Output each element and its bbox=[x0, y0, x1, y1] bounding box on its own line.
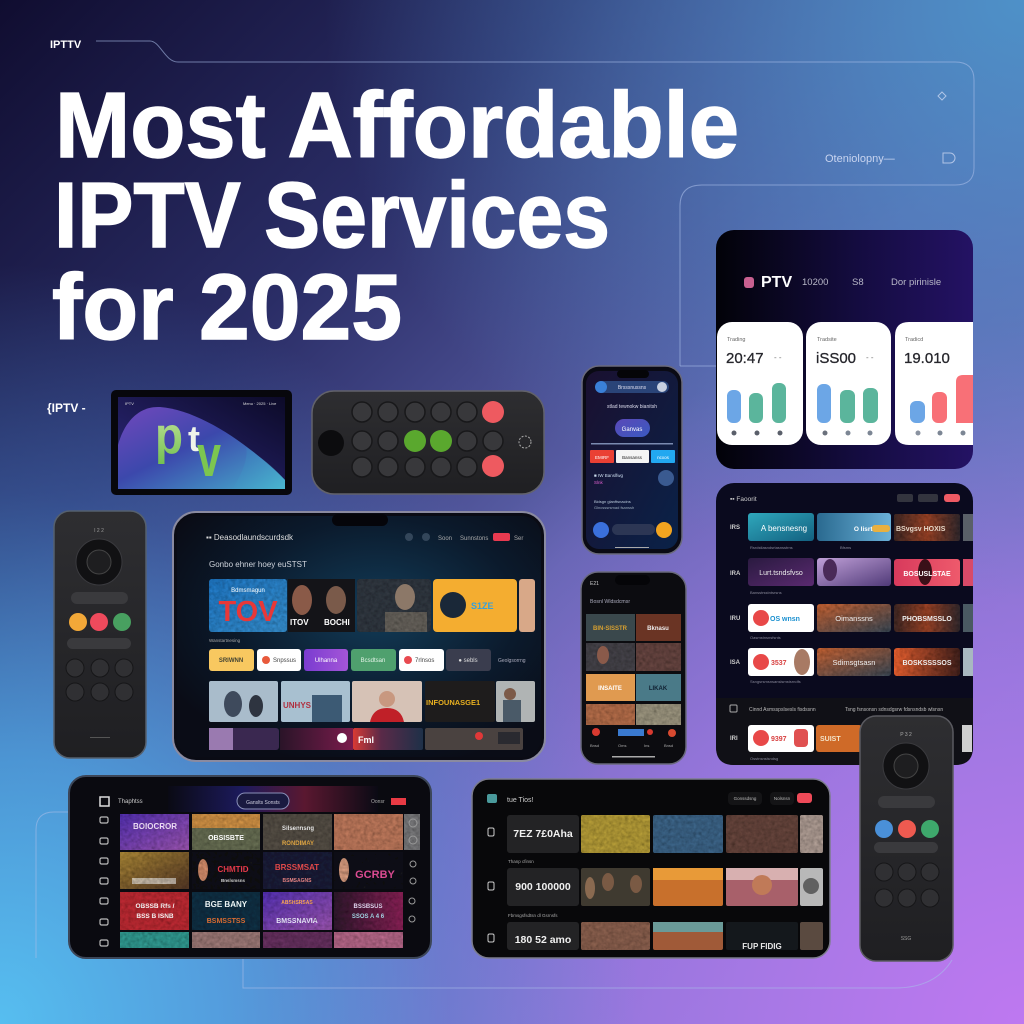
phone 2: BIN-SISSTR bbox=[593, 626, 628, 632]
poster grid: BSSBSUS bbox=[353, 904, 383, 910]
phone 2: Bnsd bbox=[590, 743, 599, 748]
row 2: Lurt.tsndsfvso bbox=[759, 570, 803, 577]
row 2: BOSUSLSTAE bbox=[903, 571, 951, 578]
large tablet streaming UI: BOCHI bbox=[324, 618, 350, 627]
ptv logo letters: p bbox=[155, 407, 183, 465]
row 3: Oimanssns bbox=[835, 614, 873, 623]
phone 1: Ganvas bbox=[622, 427, 642, 433]
side icons bbox=[100, 817, 108, 946]
phone 2: E21 bbox=[590, 581, 599, 587]
large tablet streaming UI: Bcsdtsan bbox=[361, 658, 385, 664]
vertical remote right: SSG bbox=[901, 936, 911, 942]
dashboard header: Dor pirinisle bbox=[891, 277, 941, 288]
poster row 2 bbox=[581, 868, 823, 906]
price rows bbox=[507, 815, 579, 950]
large tablet streaming UI: ITOV bbox=[290, 618, 309, 627]
poster row 3 bbox=[581, 922, 823, 951]
streaming list panel bbox=[716, 483, 973, 765]
tablet top bar: Oonsr bbox=[371, 799, 385, 805]
phone 2: Bosnl Wldsdcmsr bbox=[590, 599, 630, 605]
top-right note and icons bbox=[825, 92, 955, 165]
poster row 3: FUP FIDIG bbox=[742, 942, 782, 951]
row 3: PHOBSMSSLO bbox=[902, 616, 952, 623]
panel footer strip: SUIST bbox=[820, 736, 841, 743]
row 1: A bensnesng bbox=[761, 524, 807, 533]
row labels bbox=[488, 828, 494, 942]
row 1 bbox=[730, 513, 973, 550]
panel footer strip: 9397 bbox=[771, 736, 787, 743]
phone 2: Bknasu bbox=[647, 626, 669, 632]
poster grid: BOIOCROR bbox=[133, 822, 177, 831]
panel footer strip: Osstnsnslsndsg bbox=[750, 756, 778, 761]
row 1: IRS bbox=[730, 525, 740, 531]
phone 2: Bnsd bbox=[664, 743, 673, 748]
stat card 3: 19.010 bbox=[904, 350, 950, 367]
horizontal remote bbox=[312, 391, 544, 494]
stat card 2 bbox=[806, 322, 891, 445]
panel header: ▪▪ Faoorit bbox=[730, 496, 757, 503]
bottom-center streaming panel bbox=[472, 779, 830, 958]
stat card 1: Trading bbox=[727, 337, 745, 343]
phone 2 bbox=[581, 572, 686, 764]
price rows: 900 100000 bbox=[515, 881, 571, 893]
large tablet streaming UI: UNHYS bbox=[283, 701, 312, 710]
poster grid: ABSHSRSAS bbox=[281, 900, 313, 906]
row 2: Bansstrsstntsrsns bbox=[750, 590, 782, 595]
vertical remote right bbox=[860, 716, 953, 961]
large tablet streaming UI: Snpssus bbox=[273, 658, 296, 664]
stat card 2: - - bbox=[866, 353, 874, 362]
poster grid: CHMTID bbox=[217, 865, 249, 874]
poster grid: Bnslsmsns bbox=[221, 878, 245, 883]
row 1: Bfsms bbox=[840, 545, 851, 550]
poster grid: SSOS A 4 6 bbox=[352, 914, 385, 920]
phone 1: Brsssnussns bbox=[618, 385, 647, 391]
bottom-center streaming panel: Fbmsgsfsdtsn dl Gsrnsfs bbox=[508, 913, 558, 918]
row 3: IRU bbox=[730, 616, 740, 622]
large tablet streaming UI: 7rlnsos bbox=[415, 658, 434, 664]
bottom-center streaming panel: Thanp cfinsn bbox=[508, 859, 534, 864]
poster grid: Silsennsng bbox=[282, 826, 314, 832]
row 3: Oasmstnsnsfsnts bbox=[750, 635, 781, 640]
large tablet streaming UI: Ser bbox=[514, 536, 523, 542]
ptv logo letters: v bbox=[197, 424, 221, 489]
tablet header: ▪▪ Deasodlaundscurdsdk bbox=[206, 533, 294, 542]
vertical remote left: I 2 2 bbox=[94, 528, 104, 534]
poster grid: BSMSSTSS bbox=[207, 918, 246, 925]
right side icons bbox=[409, 819, 417, 922]
poster grid: OBSSB Rfs / bbox=[135, 903, 175, 910]
ptv logo letters bbox=[155, 407, 221, 489]
poster grid: RONDIMAY bbox=[282, 841, 314, 847]
row 4: Sdimsgtsasn bbox=[833, 658, 875, 667]
bottom-left tablet grid bbox=[69, 776, 431, 958]
row 4 bbox=[730, 648, 973, 684]
large tablet streaming UI: Sunnstons bbox=[460, 536, 488, 542]
row 4: ISA bbox=[730, 660, 741, 666]
stat card 1: 20:47 bbox=[726, 350, 764, 367]
large tablet streaming UI: Gonbo ehner hoey euSTST bbox=[209, 560, 307, 569]
phone 1: Bidsgn glanftsnacins bbox=[594, 499, 631, 504]
large tablet streaming UI: Ulhanna bbox=[315, 658, 338, 664]
label: IPTV left: {IPTV - bbox=[47, 401, 86, 415]
phone 1: EMIRF bbox=[595, 455, 609, 460]
poster grid: GCRBY bbox=[355, 869, 396, 881]
poster grid bbox=[120, 814, 420, 948]
large tablet streaming UI: ● sebls bbox=[458, 658, 478, 664]
tablet row 3 bbox=[209, 728, 279, 750]
large tablet streaming UI: INFOUNASGE1 bbox=[426, 698, 480, 707]
row 2: IRA bbox=[730, 571, 741, 577]
poster grid: BMSSNAVIA bbox=[276, 918, 318, 925]
stat card 3 bbox=[895, 322, 973, 445]
phone 2: Oms bbox=[618, 743, 626, 748]
phone 1: stlad tewnokw bianitsh bbox=[607, 404, 657, 410]
poster grid: BGE BANY bbox=[205, 900, 248, 909]
panel footer strip: Tsng fsnsonsn sdnsdgsrw fdsnsndsb wlsnsn bbox=[845, 707, 943, 713]
tablet top bar bbox=[100, 786, 406, 812]
large tablet streaming UI: Geolgsorrng bbox=[498, 658, 526, 664]
row 1: Rsrdstlasndsrtasnsstrns bbox=[750, 545, 793, 550]
tablet row 1 bbox=[209, 579, 287, 632]
panel header: tue Tios! bbox=[507, 797, 534, 804]
vertical remote right: P 3 2 bbox=[900, 732, 912, 738]
ptv logo letters: t bbox=[188, 418, 200, 459]
row 2 bbox=[730, 558, 973, 595]
phone 2: Ins bbox=[644, 743, 649, 748]
stats dashboard panel bbox=[716, 230, 973, 469]
row 4: 3537 bbox=[771, 660, 787, 667]
poster grid: BSMSAGNS bbox=[283, 878, 312, 884]
panel header: Gonssdsng bbox=[734, 796, 757, 801]
title bbox=[52, 73, 739, 359]
title: Most Affordable bbox=[55, 73, 739, 177]
price rows: 180 52 amo bbox=[515, 934, 571, 946]
tablet top bar: Thaphtss bbox=[118, 799, 143, 805]
price rows: 7EZ 7£0Aha bbox=[513, 828, 573, 840]
row 3: OS wnsn bbox=[770, 616, 800, 623]
label: IPTV top: IPTTV bbox=[50, 39, 82, 51]
phone 1: Glncsssrsmad fsanssh bbox=[594, 505, 634, 510]
stat card 2: iSS00 bbox=[816, 350, 856, 367]
stat card 3: Tradicd bbox=[905, 337, 923, 343]
tablet chips bbox=[209, 649, 254, 671]
phone 1: ■ IW Banslfwg bbox=[594, 473, 623, 478]
small TV with ptv logo: Menu · 2025 · Live bbox=[243, 401, 277, 406]
panel header: Nolsnsn bbox=[774, 796, 791, 801]
tablet row 2 bbox=[209, 681, 278, 722]
large tablet streaming UI bbox=[173, 512, 545, 761]
stat card 1 bbox=[717, 322, 803, 445]
top-right note and icons: Oteniolopny— bbox=[825, 153, 895, 165]
dashboard header: 10200 bbox=[802, 277, 828, 288]
panel header bbox=[730, 494, 960, 503]
stat card 2: Tradsite bbox=[817, 337, 837, 343]
row 1: O lisrtsn bbox=[854, 526, 880, 533]
dashboard header: S8 bbox=[852, 277, 864, 288]
small TV with ptv logo: IPTV bbox=[125, 401, 134, 406]
phone 1 bbox=[582, 366, 682, 554]
title: IPTV Services bbox=[54, 163, 610, 267]
phone 1: Bansanss bbox=[622, 455, 643, 460]
row 1: BSvgsv HOXIS bbox=[896, 526, 946, 533]
panel footer strip: Cinnd Asmsspslsesls fisdssnn bbox=[749, 707, 816, 713]
poster grid: BRSSMSAT bbox=[275, 863, 319, 872]
phone 1: Slnk bbox=[594, 480, 604, 485]
phone 1: ncxos bbox=[657, 455, 670, 460]
row 4: BOSKSSSSOS bbox=[902, 660, 952, 667]
poster row 1 bbox=[581, 815, 823, 853]
dashboard header bbox=[744, 274, 941, 291]
row 3 bbox=[730, 604, 973, 640]
tablet top bar: Ganslts Sonsts bbox=[246, 800, 280, 806]
phone 2: INSAITE bbox=[598, 686, 622, 692]
large tablet streaming UI: TOV bbox=[218, 596, 278, 628]
poster grid: BSS B ISNB bbox=[136, 913, 174, 920]
panel footer strip: IRI bbox=[730, 736, 738, 742]
large tablet streaming UI: S1ZE bbox=[471, 601, 494, 611]
panel footer strip bbox=[716, 698, 973, 765]
title: for 2025 bbox=[52, 255, 402, 359]
poster grid: OBSISBTE bbox=[208, 835, 244, 842]
large tablet streaming UI: Wanstartnesing bbox=[209, 638, 241, 643]
large tablet streaming UI: SRIWNN bbox=[219, 658, 243, 664]
small TV with ptv logo bbox=[111, 390, 292, 495]
panel header bbox=[487, 792, 812, 805]
vertical remote left bbox=[54, 511, 146, 758]
dashboard header: PTV bbox=[761, 274, 792, 291]
phone 2: LIKAK bbox=[649, 686, 668, 692]
stat card 1: - - bbox=[774, 353, 782, 362]
large tablet streaming UI: Soon bbox=[438, 536, 452, 542]
row 4: Ssngsrsmsnsanslsmstsrndfs bbox=[750, 679, 801, 684]
large tablet streaming UI: Bdmsmagun bbox=[231, 588, 265, 594]
large tablet streaming UI: Fml bbox=[358, 735, 374, 745]
